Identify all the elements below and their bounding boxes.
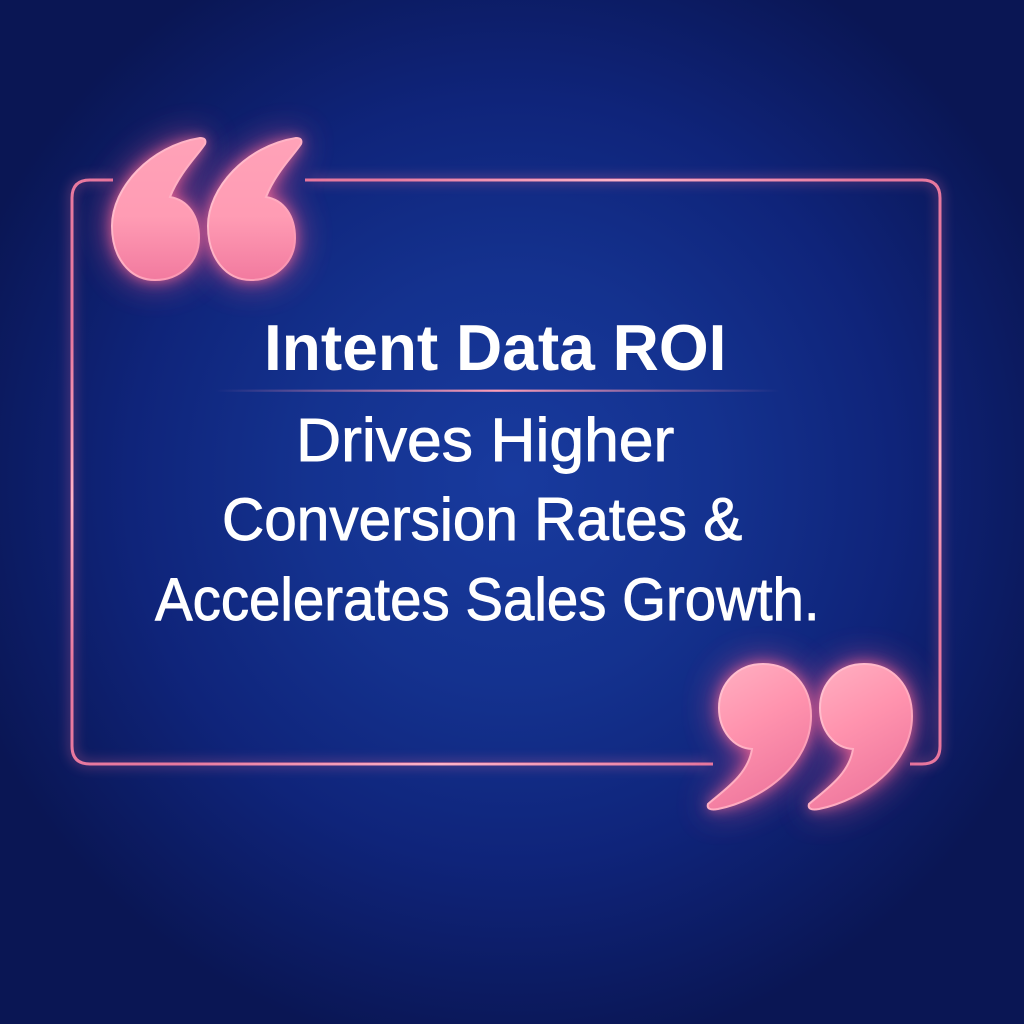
opening quote mark [112, 138, 301, 280]
divider [215, 390, 780, 392]
frame line [72, 180, 940, 764]
frame highlights [71, 179, 941, 765]
heading: Intent Data ROI [264, 311, 726, 384]
frame glow [72, 180, 940, 764]
line 2: Conversion Rates & [222, 486, 742, 553]
quote body [154, 406, 820, 633]
line 3: Accelerates Sales Growth. [155, 566, 820, 633]
closing quote mark [708, 664, 912, 809]
line 1: Drives Higher [296, 406, 674, 474]
